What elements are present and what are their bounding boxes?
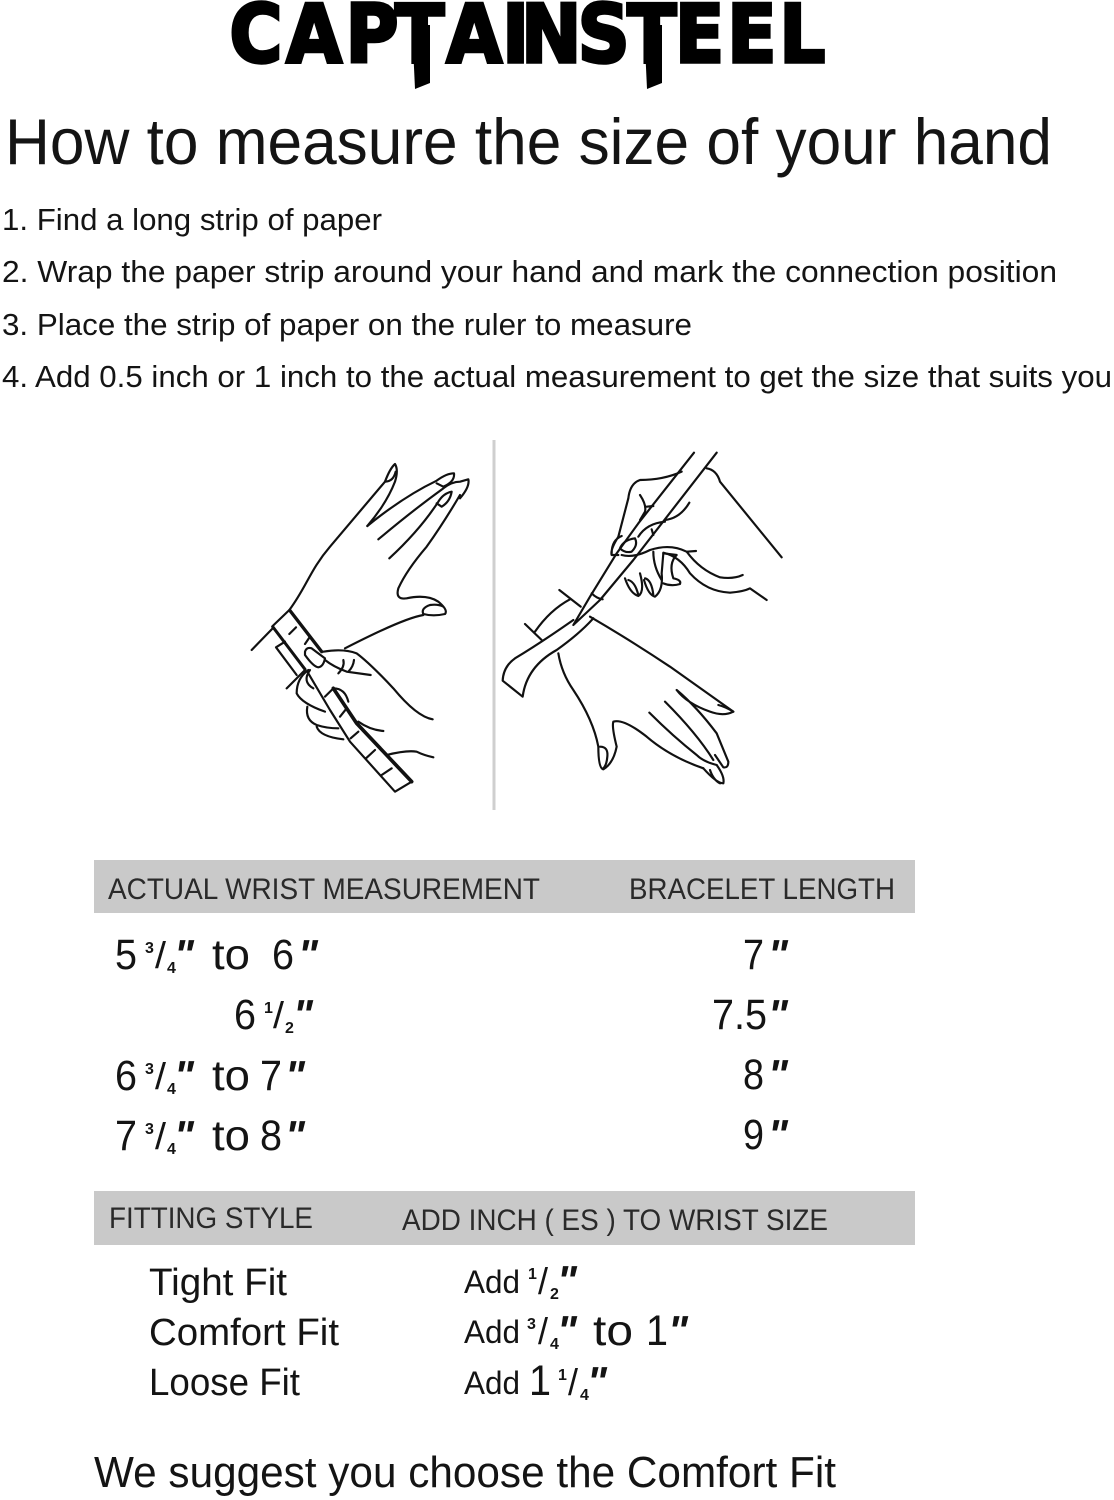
fit row: comfort: 4 <box>550 1336 559 1353</box>
fit row: tight: 2 <box>550 1286 559 1303</box>
size row 2: 1 <box>264 1000 273 1017</box>
size row 2: / <box>273 995 285 1036</box>
fit row: tight: 1 <box>528 1266 537 1283</box>
fit row: comfort <box>149 1307 689 1355</box>
size row 4: 8 <box>260 1112 282 1160</box>
size row 1 <box>115 931 789 979</box>
fit row: loose: " <box>587 1358 608 1405</box>
fit row: comfort: to <box>593 1307 633 1355</box>
table header: fitting style <box>94 1191 915 1245</box>
size row 2: 6 <box>234 991 256 1039</box>
table header: wrist measurement and bracelet length: ACTUAL WRIST MEASUREMENT <box>108 873 540 906</box>
size row 1: 5 <box>115 931 137 979</box>
size row 1: / <box>155 935 167 976</box>
size row 4: / <box>155 1116 167 1157</box>
size row 3 <box>115 1051 789 1100</box>
icon: hand marking paper strip with pen <box>503 453 782 783</box>
size row 3: 7 <box>260 1052 282 1100</box>
size row 2 <box>234 991 789 1039</box>
size row 4: 4 <box>167 1141 176 1158</box>
fit row: comfort: Comfort Fit <box>149 1312 339 1354</box>
size row 2: " <box>293 991 314 1038</box>
size row 1: 3 <box>145 940 154 957</box>
size row 1: to <box>212 931 250 979</box>
table header: wrist measurement and bracelet length: BRACELET LENGTH <box>629 873 895 906</box>
fit row: loose: 1 <box>529 1357 551 1405</box>
size row 4: to <box>212 1112 250 1160</box>
size row 1: " <box>174 931 195 978</box>
fit row: comfort: / <box>538 1311 549 1352</box>
size row 1: " <box>298 931 319 978</box>
size row 3: " <box>285 1052 306 1099</box>
fit row: tight: / <box>538 1261 549 1302</box>
size row 4 <box>115 1111 789 1160</box>
size row 4: " <box>174 1112 195 1159</box>
size row 3: 8 <box>743 1051 764 1099</box>
instructions list: 3. Place the strip of paper on the ruler to measure <box>2 307 692 342</box>
icon: hand measuring wrist with tape <box>252 464 469 792</box>
size row 4: 7 <box>115 1112 137 1160</box>
instructions list: 4. Add 0.5 inch or 1 inch to the actual measurement to get the size that suits you <box>2 359 1112 394</box>
size row 3: to <box>212 1052 250 1100</box>
fit row: loose: / <box>568 1362 579 1403</box>
table header: wrist measurement and bracelet length <box>94 860 915 913</box>
size row 1: 6 <box>272 931 294 979</box>
instructions list: 1. Find a long strip of paper <box>2 202 382 237</box>
size row 4: 9 <box>743 1111 764 1159</box>
size row 3: 3 <box>145 1061 154 1078</box>
size row 2: 2 <box>285 1020 294 1037</box>
fit row: tight: Tight Fit <box>149 1262 287 1304</box>
fit row: tight: " <box>557 1257 578 1304</box>
size row 2: 7.5 <box>712 991 767 1039</box>
fit row: loose: Add <box>464 1365 520 1401</box>
fit row: loose: 1 <box>558 1367 567 1384</box>
size row 2: " <box>768 991 789 1038</box>
title: How to measure the size of your hand <box>5 105 1052 178</box>
fit row: comfort: Add <box>464 1314 520 1350</box>
size row 4: " <box>768 1111 789 1158</box>
illustration divider <box>492 440 496 810</box>
size row 1: 4 <box>167 960 176 977</box>
fit row: loose: 4 <box>580 1387 589 1404</box>
size row 4: 3 <box>145 1121 154 1138</box>
table header: fitting style: FITTING STYLE <box>109 1202 313 1235</box>
closing recommendation: We suggest you choose the Comfort Fit <box>94 1448 836 1497</box>
size row 3: 6 <box>115 1052 137 1100</box>
table header: fitting style: ADD INCH ( ES ) TO WRIST SIZE <box>402 1204 828 1237</box>
instructions list: 2. Wrap the paper strip around your hand and mark the connection position <box>2 254 1057 289</box>
size row 4: " <box>285 1112 306 1159</box>
instructions list <box>2 202 1112 394</box>
fit row: tight: Add <box>464 1264 520 1300</box>
fit row: tight <box>149 1257 578 1304</box>
fit row: comfort: 1 <box>646 1307 668 1355</box>
size row 3: " <box>174 1052 195 1099</box>
fit row: loose <box>149 1357 608 1405</box>
fit row: comfort: " <box>668 1307 689 1354</box>
size row 1: 7 <box>743 931 764 979</box>
fit row: comfort: " <box>557 1307 578 1354</box>
fit row: loose: Loose Fit <box>149 1362 300 1404</box>
size row 3: 4 <box>167 1081 176 1098</box>
size row 3: / <box>155 1056 167 1097</box>
size row 1: " <box>768 931 789 978</box>
fit row: comfort: 3 <box>527 1316 536 1333</box>
size row 3: " <box>768 1051 789 1098</box>
